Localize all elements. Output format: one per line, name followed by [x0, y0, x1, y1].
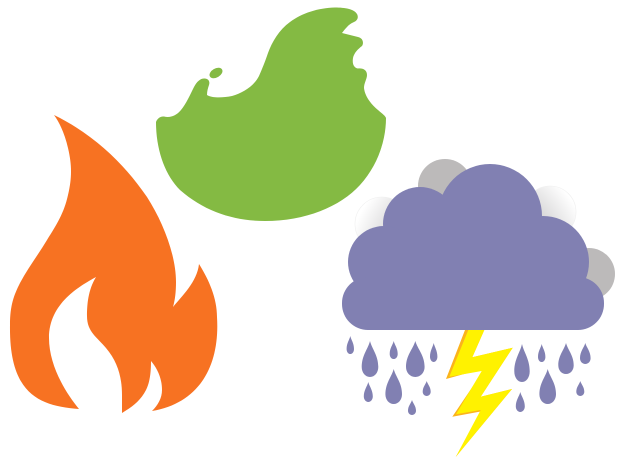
icon: green water splash	[156, 8, 386, 221]
icon: storm cloud	[342, 159, 615, 330]
back cloud puffs	[355, 159, 615, 300]
main purple cloud	[342, 164, 604, 330]
rain drops: right group	[514, 343, 591, 412]
icon: lightning bolt	[446, 330, 513, 457]
icon: orange flame	[10, 115, 217, 413]
rain drops: left group	[347, 336, 437, 415]
